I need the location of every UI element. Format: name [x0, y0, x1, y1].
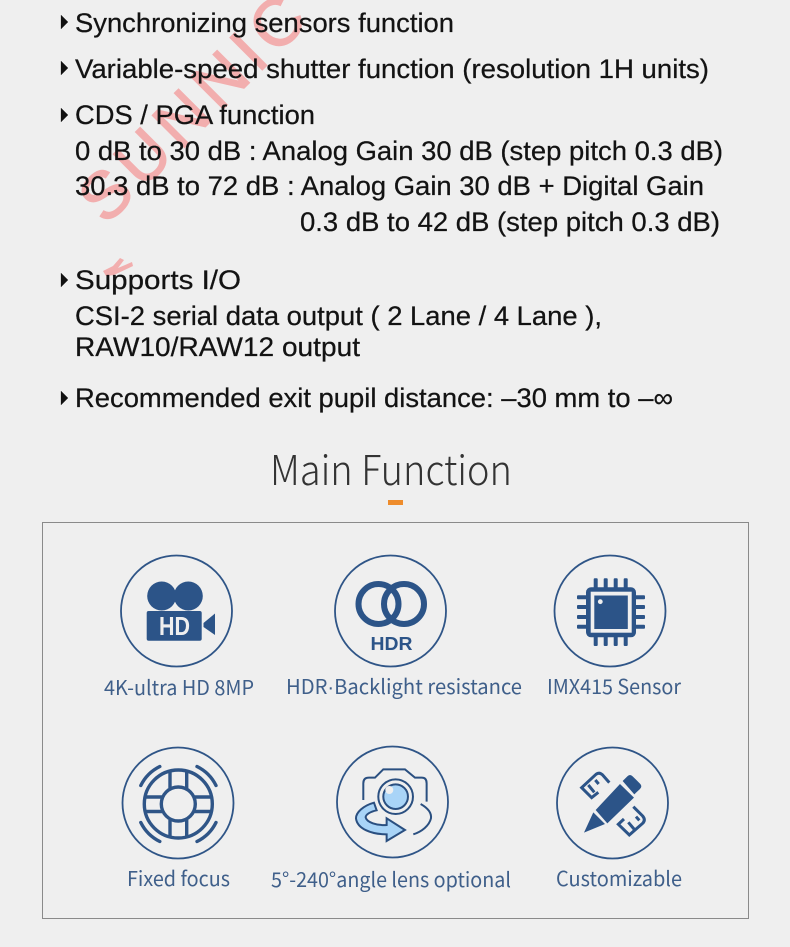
- icon: HD camera: [121, 556, 232, 666]
- spec line: analog gain: 0 dB to 30 dB : Analog Gain 30 dB (step pitch 0.3 dB): [75, 136, 723, 166]
- heading accent bar: [388, 500, 403, 505]
- feature: customizable: [556, 748, 682, 892]
- bullet: IO: [61, 273, 68, 287]
- icon: lifebuoy: [122, 748, 234, 858]
- panel: main function: [42, 522, 748, 918]
- spec line: digital gain range: 0.3 dB to 42 dB (step pitch 0.3 dB): [300, 207, 720, 237]
- label: Fixed focus: [127, 862, 230, 892]
- bullet: shutter: [61, 61, 68, 75]
- bullet: exit pupil: [61, 391, 68, 405]
- bullet: CDS: [61, 108, 68, 122]
- feature: fixed focus: [122, 748, 234, 892]
- label: Customizable: [556, 862, 682, 892]
- icon: HDR rings: [335, 556, 446, 666]
- feature: IMX415 sensor: [547, 556, 681, 700]
- icon: HDR rings: HDR: [370, 634, 412, 654]
- icon: chip: [554, 556, 666, 666]
- icon: pencil and ruler: [557, 748, 668, 858]
- feature: HDR: [286, 556, 522, 700]
- spec line: exit pupil: Recommended exit pupil distance: –30 mm to –∞: [75, 383, 673, 413]
- label: HDR·Backlight resistance: [286, 670, 522, 700]
- feature: 4K HD: [104, 556, 254, 701]
- feature: angle lens: [271, 746, 511, 893]
- spec line: CSI-2: CSI-2 serial data output ( 2 Lane / 4 Lane ),: [75, 301, 602, 331]
- heading: Main Function: [270, 437, 512, 497]
- spec line: supports IO: Supports I/O: [75, 265, 241, 295]
- icon: HD camera: HD: [159, 611, 190, 641]
- spec list: [61, 8, 723, 413]
- bullet: sync: [61, 15, 68, 29]
- label: 4K-ultra HD 8MP: [104, 671, 254, 701]
- label: 5°-240°angle lens optional: [271, 863, 511, 893]
- icon: rotating camera: [337, 746, 448, 858]
- spec line: digital gain: 30.3 dB to 72 dB : Analog Gain 30 dB + Digital Gain: [75, 171, 704, 201]
- spec line: synchronizing sensors: Synchronizing sensors function: [75, 8, 454, 38]
- spec line: CDS PGA: CDS / PGA function: [75, 100, 315, 130]
- spec line: variable-speed shutter: Variable-speed shutter function (resolution 1H units): [75, 54, 709, 84]
- spec line: RAW output: RAW10/RAW12 output: [75, 332, 361, 362]
- label: IMX415 Sensor: [547, 670, 681, 700]
